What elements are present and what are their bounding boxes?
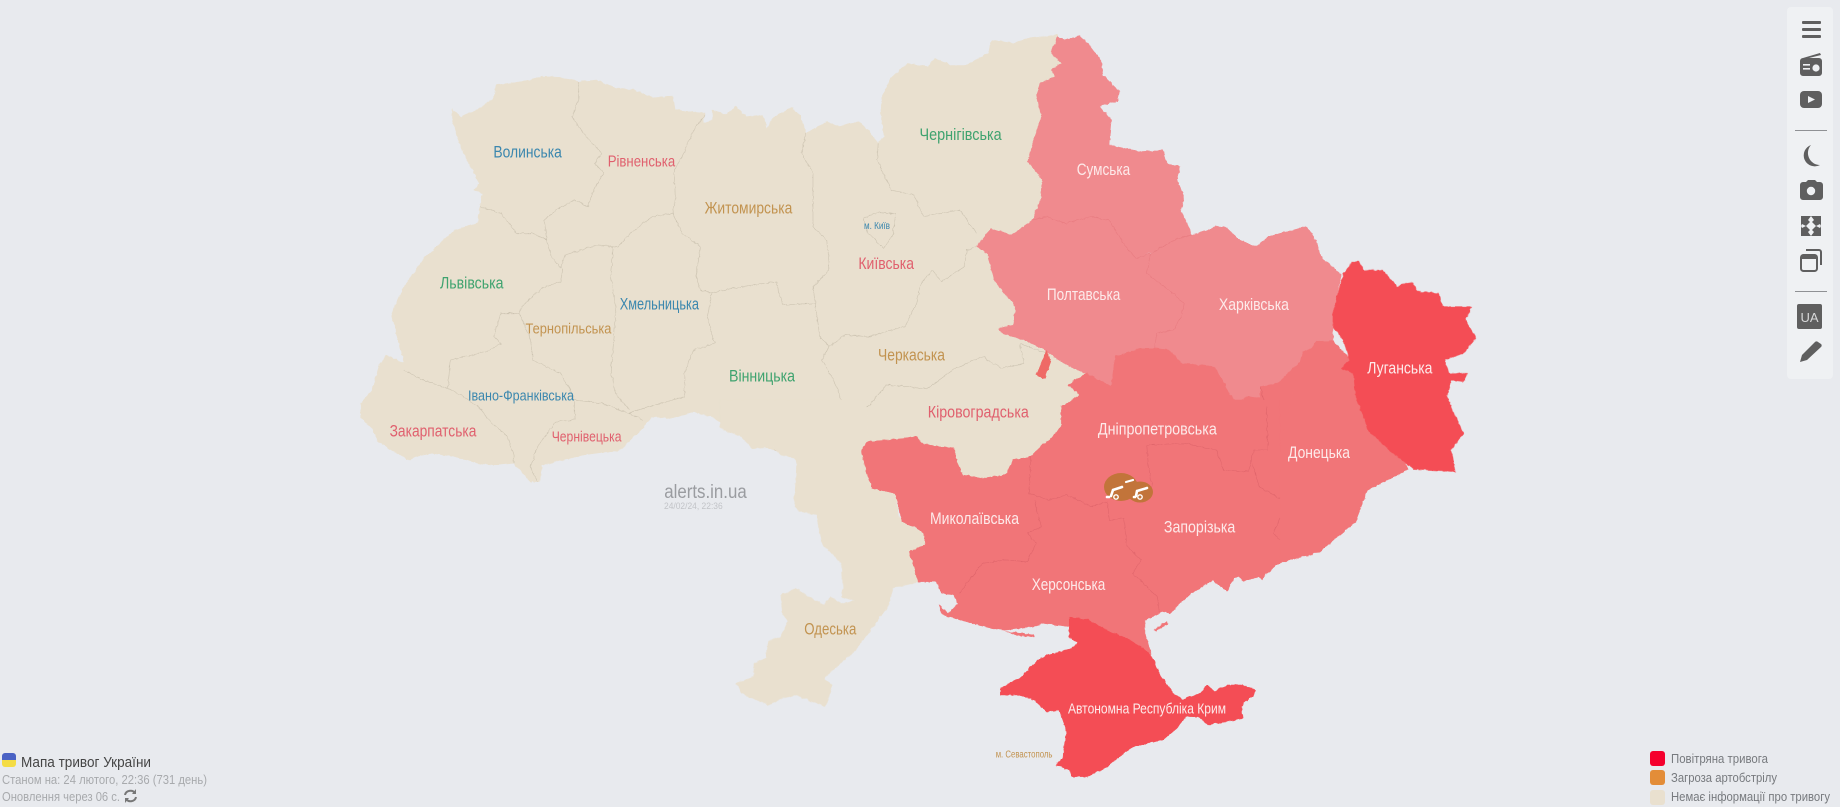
label: Луганська: Луганська [1367, 358, 1433, 377]
oblast labels [390, 125, 1433, 760]
watermark timestamp: 24/02/24, 22:36 [664, 501, 723, 512]
icon: pencil [1800, 341, 1822, 362]
label: м. Севастополь: м. Севастополь [996, 750, 1052, 760]
legend: air raid: Повітряна тривога [1671, 752, 1768, 766]
region: Crimea [1000, 617, 1256, 777]
label: Чернівецька: Чернівецька [552, 429, 622, 446]
label: Черкаська: Черкаська [878, 345, 945, 364]
label: Житомирська: Житомирська [705, 198, 793, 217]
artillery threat area [1104, 473, 1153, 502]
watermark site name: alerts.in.ua [664, 482, 747, 503]
label: Чернігівська: Чернігівська [920, 125, 1002, 144]
watermark [664, 482, 747, 512]
icon: camera [1800, 180, 1823, 200]
label: Волинська: Волинська [493, 142, 562, 162]
region: Donetsk oblast south [1209, 340, 1408, 581]
region: Sumy, Poltava and Kharkiv oblasts [976, 36, 1341, 403]
icon: fullscreen [1801, 216, 1821, 236]
label: Автономна Республіка Крим: Автономна Республіка Крим [1068, 701, 1226, 718]
label: Тернопільська: Тернопільська [526, 321, 612, 338]
label: Кіровоградська: Кіровоградська [928, 402, 1029, 421]
label: Запорізька: Запорізька [1164, 517, 1236, 536]
label: Херсонська: Херсонська [1032, 575, 1106, 594]
update countdown: Оновлення через 06 с. [2, 790, 120, 804]
label: Львівська: Львівська [440, 273, 504, 292]
icon: windows [1801, 250, 1821, 271]
panel: toolbar [1787, 7, 1833, 379]
label: Харківська: Харківська [1219, 295, 1289, 314]
region: western and central oblasts with no information [361, 35, 1139, 500]
legend [1650, 751, 1831, 805]
language button: UA [1800, 310, 1819, 325]
block: title and status [2, 753, 207, 804]
label: Миколаївська: Миколаївська [930, 509, 1019, 528]
region: Mykolaiv, Kherson, Zaporizhzhia oblasts and south Dnipropetrovsk [861, 400, 1280, 657]
region: Odesa oblast [720, 400, 925, 707]
language button [1797, 304, 1822, 329]
label: Вінницька: Вінницька [729, 366, 795, 385]
icon: radio [1800, 53, 1822, 76]
icon: moon [1804, 145, 1820, 166]
icon: menu [1802, 21, 1821, 38]
label: Рівненська: Рівненська [608, 153, 675, 170]
label: Полтавська: Полтавська [1047, 285, 1121, 304]
icon: video [1800, 91, 1822, 108]
icon: refresh [125, 789, 136, 803]
region: Dnipropetrovsk and Donetsk oblasts north [1012, 342, 1397, 467]
label: Закарпатська: Закарпатська [390, 421, 477, 440]
title: Мапа тривог України [21, 755, 151, 771]
icon: Ukrainian flag [2, 753, 16, 767]
map of Ukraine [361, 35, 1476, 777]
label: м. Київ: м. Київ [864, 221, 890, 232]
label: Сумська: Сумська [1077, 160, 1131, 179]
label: Донецька: Донецька [1288, 443, 1350, 462]
status date: Станом на: 24 лютого, 22:36 (731 день) [2, 773, 207, 787]
region: Kirovohrad alert hromada [1036, 350, 1051, 379]
label: Київська: Київська [858, 254, 914, 273]
legend: artillery: Загроза артобстрілу [1671, 771, 1778, 785]
region: Luhansk oblast [1333, 262, 1476, 472]
label: Одеська: Одеська [804, 619, 857, 638]
label: Хмельницька: Хмельницька [620, 295, 700, 313]
label: Дніпропетровська: Дніпропетровська [1098, 420, 1218, 438]
label: Івано-Франківська: Івано-Франківська [468, 388, 575, 405]
